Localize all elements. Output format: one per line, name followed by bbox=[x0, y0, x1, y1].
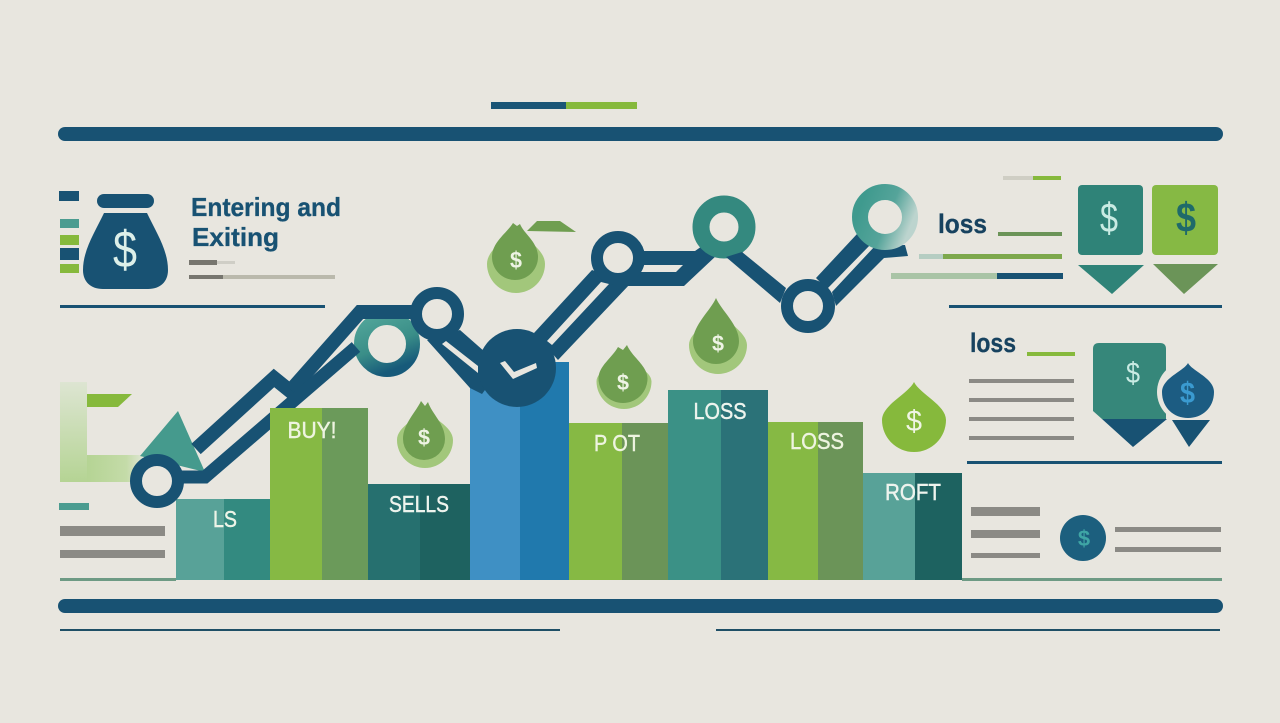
icon: drop with leaf: $ bbox=[510, 247, 522, 273]
arrow: green down bbox=[1153, 264, 1218, 294]
double segment to node 7 bbox=[816, 234, 908, 306]
icon: drop 4: $ bbox=[712, 331, 724, 356]
bar: LOSS second bbox=[768, 422, 863, 580]
bar: LS: LS bbox=[213, 506, 237, 532]
text placeholder lines bbox=[189, 260, 335, 279]
bar: SELLS bbox=[368, 484, 470, 580]
check node bbox=[478, 329, 556, 407]
left notes bbox=[59, 503, 165, 558]
icon: drop 3: $ bbox=[617, 370, 629, 395]
icon: navy drop with arrow: $ bbox=[1180, 377, 1195, 410]
icon: money bag: $ bbox=[113, 221, 137, 279]
loss label: loss bbox=[938, 209, 987, 239]
icon: drop 2: $ bbox=[418, 425, 430, 450]
panel: lower right notes bbox=[971, 507, 1221, 561]
segment up to node 4 bbox=[534, 270, 630, 360]
bar: LOSS bbox=[668, 390, 768, 580]
divider lower right bbox=[967, 461, 1222, 464]
icon: green dollar card: $ bbox=[1176, 194, 1196, 241]
node 4 bbox=[597, 237, 639, 279]
header accent bar bbox=[491, 102, 637, 109]
node 1 bbox=[136, 460, 178, 502]
node 3 bbox=[416, 293, 458, 335]
icon: drop with leaf bbox=[487, 221, 576, 293]
gray lines bbox=[1115, 527, 1221, 552]
segment to check node bbox=[427, 330, 502, 394]
icon: drop 5 bbox=[882, 382, 946, 452]
pale L-shaped arrow base bbox=[60, 382, 143, 482]
panel: loss top right bbox=[891, 176, 1218, 294]
text lines bbox=[969, 352, 1075, 440]
node 6 bbox=[787, 285, 829, 327]
bar: P OT: P OT bbox=[594, 430, 640, 456]
icon: teal dollar card bbox=[1078, 185, 1143, 255]
icon: navy drop with arrow bbox=[1157, 361, 1219, 447]
title: Exiting bbox=[192, 222, 279, 252]
rule lines bbox=[891, 232, 1063, 279]
icon: teal card with arrow: $ bbox=[1126, 357, 1140, 390]
bar: LS bbox=[176, 499, 270, 580]
baseline left bbox=[60, 578, 176, 581]
baseline right bbox=[962, 578, 1222, 581]
icon: teal card with arrow bbox=[1093, 343, 1167, 447]
footer lines bbox=[60, 629, 1220, 631]
node 2 teal bbox=[361, 318, 413, 370]
arrow: teal down bbox=[1078, 265, 1144, 294]
trend line: front segments and nodes bbox=[136, 192, 910, 502]
trend line: rear segments bbox=[170, 312, 437, 477]
node 5 teal bbox=[701, 204, 747, 250]
gray bars bbox=[971, 507, 1040, 558]
bar: P OT bbox=[569, 423, 669, 580]
icon: drop 4 bbox=[689, 298, 747, 374]
legend swatches bbox=[59, 191, 79, 273]
icon: drop 5: $ bbox=[906, 405, 922, 438]
teal triangle bbox=[140, 411, 205, 472]
bottom rule bbox=[58, 599, 1223, 613]
bar: blue bbox=[470, 362, 569, 580]
icon: dollar coin: $ bbox=[1078, 526, 1090, 551]
panel: loss middle right bbox=[969, 328, 1219, 447]
divider right bbox=[949, 305, 1222, 308]
icon: drop 3 bbox=[596, 345, 652, 409]
text lines bbox=[1003, 176, 1061, 180]
bar: SELLS: SELLS bbox=[389, 491, 449, 517]
loss label: loss bbox=[970, 328, 1016, 358]
bar: LOSS: LOSS bbox=[694, 398, 746, 424]
segment down to node 6 bbox=[726, 252, 786, 303]
bar: BUY! bbox=[270, 408, 368, 580]
icon: money bag bbox=[83, 194, 168, 289]
node 7 teal bbox=[860, 192, 910, 242]
bar: ROFT bbox=[863, 473, 962, 580]
panel: title block bbox=[59, 191, 341, 289]
bar: ROFT: ROFT bbox=[885, 479, 941, 505]
double segment to node 5 bbox=[625, 244, 717, 286]
icon: drop 2 bbox=[397, 401, 453, 468]
bar: BUY!: BUY! bbox=[288, 417, 336, 443]
icon: dollar coin bbox=[1060, 515, 1106, 561]
top rule bbox=[58, 127, 1223, 141]
bar chart bbox=[176, 362, 962, 580]
icon: teal dollar card: $ bbox=[1100, 194, 1118, 241]
bar: LOSS second: LOSS bbox=[790, 428, 844, 454]
title: Entering and bbox=[191, 192, 341, 222]
icon: green dollar card bbox=[1152, 185, 1218, 255]
divider left bbox=[60, 305, 325, 308]
